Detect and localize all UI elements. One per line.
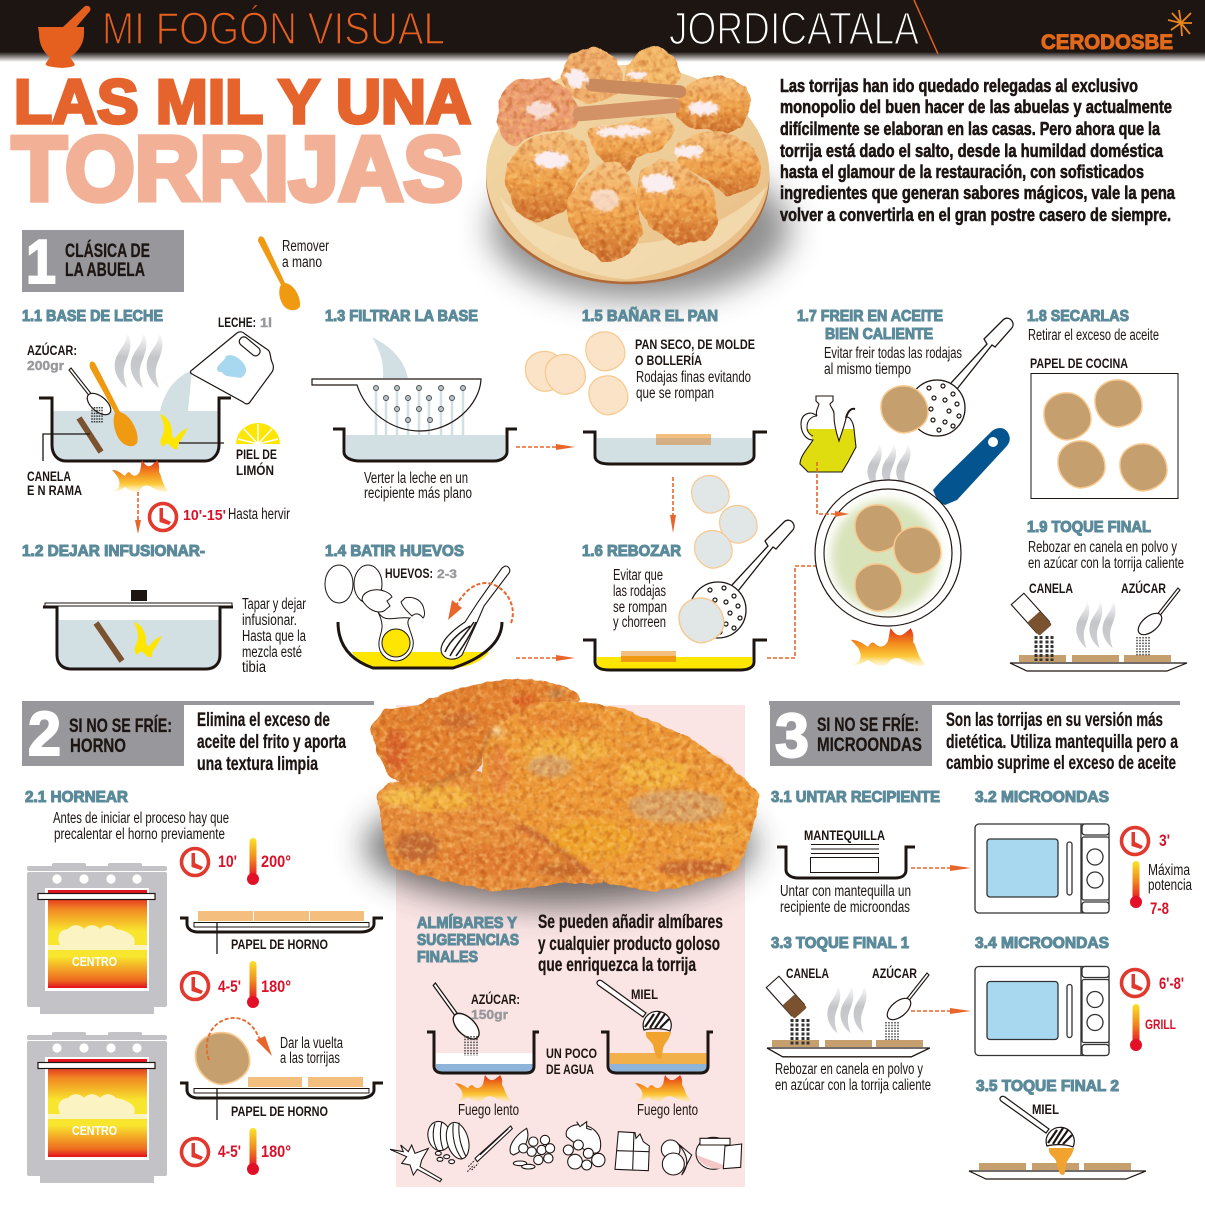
step 3.3 final touch 1: en azúcar con la torrija caliente [775,1077,931,1094]
final time and temp [182,1128,291,1175]
icon: star [1168,10,1192,36]
arrow: 3.1 to 3.2 [911,865,971,871]
step 1.6 coat: y chorreen [613,614,666,631]
step 1.1 milk base: 1.1 BASE DE LECHE [22,308,163,325]
step 3.3 final touch 1: 3.3 TOQUE FINAL 1 [771,935,909,952]
step 1.9 final touch: 1.9 TOQUE FINAL [1027,519,1151,536]
step 1.1 milk base: LIMÓN [236,461,274,478]
section badge 1: 1 [26,228,56,297]
step 1.1 milk base: 1l [260,315,272,330]
panel: section 2 oven [22,700,383,1183]
bake time and temp: 180° [261,977,291,996]
brand: Mi Fogón Visual: MI FOGÓN VISUAL [102,3,445,54]
step 1.8 dry: 1.8 SECARLAS [1027,308,1129,325]
section bar [769,701,1180,705]
icon: mortar and pestle [38,6,90,68]
sugar syrup pot: 150gr [471,1007,508,1022]
step 3.2 microwave: 3.2 MICROONDAS [975,789,1109,806]
photo: big torrija [365,678,760,906]
label: a little water: UN POCO [546,1046,597,1061]
step 1.9 final touch: CANELA [1029,581,1073,596]
step 3.4 microwave grill: 3.4 MICROONDAS [975,935,1109,952]
icon: frying pan [815,428,1010,626]
step 1.4 beat eggs: 2-3 [437,567,457,581]
section description: aceite del frito y aporta [197,732,346,753]
step 3.3 final touch 1: CANELA [786,966,829,981]
step 1.1 milk base: CANELA [27,469,71,484]
stirring note: Remover [282,238,329,255]
syrups description: Se pueden añadir almíbares [538,912,723,933]
preheat time and temp: 10' [218,852,237,871]
heading: syrups [417,913,519,966]
oven tray 1: PAPEL DE HORNO [231,937,328,952]
honey syrup pot: Fuego lento [637,1102,698,1119]
step 1.9 final touch [1010,519,1187,671]
step 1.2 infuse: Tapar y dejar [242,596,306,613]
step 2.1 bake: precalentar el horno previamente [54,826,225,843]
step 3.2 microwave: 3' [1159,831,1170,850]
section badge 1: LA ABUELA [65,260,145,281]
step 2.1 bake: 2.1 HORNEAR [25,789,128,806]
section description: una textura limpia [197,754,318,775]
arrow: 1.5 to 1.6 [670,477,676,533]
step 3.4 microwave grill [975,935,1184,1056]
step 1.7 fry: 1.7 FREIR EN ACEITE [797,308,943,325]
heading: syrups: ALMÍBARES Y [417,913,517,932]
step 3.2 microwave: 7-8 [1150,899,1169,918]
step 3.1 grease: recipiente de microondas [780,899,910,916]
step 1.7 fry [797,308,1013,666]
step 1.2 infuse: tibia [242,659,266,676]
section badge 2 [22,700,184,769]
syrups description: y cualquier producto goloso [538,934,720,955]
step 3.4 microwave grill: GRILL [1145,1016,1176,1032]
step 3.4 microwave grill: 6'-8' [1159,974,1184,993]
step 1.3 filter [312,308,517,502]
step 3.3 final touch 1: Rebozar en canela en polvo y [775,1061,923,1078]
step 3.5 final touch 2 [969,1078,1146,1179]
honey syrup pot [597,980,713,1119]
title: LAS MIL Y UNA [14,68,471,137]
icon: oven 1 [27,863,167,1014]
step 1.1 milk base: E N RAMA [27,483,82,498]
step 2.1 bake: Antes de iniciar el proceso hay que [53,810,229,827]
sugar syrup pot: Fuego lento [458,1102,519,1119]
photo: plate of torrijas [486,47,790,300]
panel: section 3 microwave [766,701,1192,1179]
section badge 2: HORNO [70,736,126,757]
title [12,68,471,220]
step 1.1 milk base: LECHE: [218,315,256,330]
final time and temp: 180° [261,1142,291,1161]
step 1.1 milk base: AZÚCAR: [27,343,77,358]
step 1.5 soak bread: PAN SECO, DE MOLDE [635,337,755,352]
section badge 3: MICROONDAS [817,735,922,756]
step 1.1 milk base: PIEL DE [236,446,277,462]
step 1.6 coat: 1.6 REBOZAR [582,543,681,560]
section badge 2: SI NO SE FRÍE: [69,715,172,737]
section badge 3: SI NO SE FRÍE: [817,714,919,736]
preheat time and temp: 200° [261,852,291,871]
step 3.1 grease [771,789,940,916]
step 1.1 milk base [22,308,290,534]
sugar syrup pot: AZÚCAR: [471,992,520,1007]
step 1.3 filter: recipiente más plano [364,485,472,502]
syrups description: que enriquezca la torrija [538,955,696,976]
arrow: 1.3 to 1.5 [516,444,575,450]
title: TORRIJAS [12,119,463,220]
step 1.1 milk base: 10'-15' [183,507,226,524]
step 1.1 milk base: Hasta hervir [228,506,290,523]
step 3.3 final touch 1: AZÚCAR [872,966,917,981]
step 1.2 infuse: mezcla esté [242,644,302,661]
oven tray 1 [180,911,383,954]
step 1.7 fry: Evitar freir todas las rodajas [824,345,962,362]
syrups description [538,912,723,976]
panel: syrups background [396,705,745,1187]
label: a little water [546,1046,597,1077]
stirring note: a mano [282,254,322,271]
oven tray 2 with flip: a las torrijas [280,1050,340,1067]
section badge 1 [22,228,184,297]
step 1.7 fry: BIEN CALIENTE [825,326,933,343]
step 1.7 fry: al mismo tiempo [824,361,911,378]
icon: oil bottle [800,396,856,472]
step 1.4 beat eggs [325,543,513,668]
step 1.5 soak bread [525,305,767,464]
stirring note [258,236,329,310]
section badge 2: 2 [28,700,61,769]
oven tray 2 with flip [180,1018,383,1120]
intro paragraph [780,76,1176,225]
oven tray 2 with flip: Dar la vuelta [280,1035,343,1052]
arrow: 3.3 to 3.4 [911,1008,971,1014]
step 1.2 infuse [22,543,306,676]
step 1.6 coat: se rompan [613,599,667,616]
step 1.2 infuse: Hasta que la [242,628,306,645]
label: a little water: DE AGUA [546,1062,594,1077]
icons: vanilla, cocoa, spices, fruit, chocolate, eggs, jar [390,1120,742,1182]
step 1.6 coat: Evitar que [613,567,663,584]
heading: syrups: FINALES [417,949,478,966]
heading: syrups: SUGERENCIAS [417,932,519,949]
preheat time and temp [182,838,291,885]
honey syrup pot: MIEL [631,987,658,1002]
section description [197,710,346,775]
oven tray 2 with flip: PAPEL DE HORNO [231,1104,328,1119]
step 3.1 grease: 3.1 UNTAR RECIPIENTE [771,789,940,806]
step 3.1 grease: MANTEQUILLA [804,828,885,843]
step 2.1 bake [25,789,229,843]
sugar syrup pot [427,983,539,1119]
step 3.1 grease: Untar con mantequilla un [780,883,911,900]
section badge 1: CLÁSICA DE [65,240,150,262]
section description: Elimina el exceso de [197,710,330,731]
step 1.2 infuse: infusionar. [242,612,297,629]
step 3.3 final touch 1 [766,935,931,1094]
step 3.2 microwave [975,789,1192,918]
step 1.4 beat eggs: 1.4 BATIR HUEVOS [325,543,464,560]
step 3.2 microwave: potencia [1148,877,1192,894]
step 1.8 dry [1027,308,1178,498]
section description [946,710,1178,774]
step 1.5 soak bread: que se rompan [636,385,714,402]
step 1.9 final touch: AZÚCAR [1121,581,1166,596]
final time and temp: 4-5' [218,1142,241,1161]
step 1.8 dry: PAPEL DE COCINA [1030,356,1128,371]
decorative slash [914,0,938,54]
brand: Jordi Catala: JORDICATALA [669,3,919,54]
step 3.5 final touch 2: MIEL [1032,1102,1059,1117]
arrow: 1.4 to 1.6 [516,655,575,661]
step 3.5 final touch 2: 3.5 TOQUE FINAL 2 [976,1078,1119,1095]
step 1.4 beat eggs: HUEVOS: [385,566,433,581]
step 3.2 microwave: Máxima [1148,862,1190,879]
step 1.5 soak bread: Rodajas finas evitando [636,369,751,386]
section badge 3: 3 [775,702,809,771]
bake time and temp [182,961,291,1008]
bake time and temp: 4-5' [218,977,241,996]
section bar [22,701,374,705]
panel: section 1 classic [22,228,1187,676]
step 1.3 filter: 1.3 FILTRAR LA BASE [325,308,478,325]
step 1.6 coat: las rodajas [613,583,666,600]
step 1.5 soak bread: O BOLLERÍA [635,353,702,368]
step 1.1 milk base: 200gr [27,358,64,373]
icon: oven 2 [27,1032,167,1183]
header bar [0,0,1205,68]
step 1.3 filter: Verter la leche en un [364,470,468,487]
panel: syrups and suggestions [390,912,742,1182]
section badge 3 [770,702,932,771]
step 1.2 infuse: 1.2 DEJAR INFUSIONAR- [22,543,205,560]
step 1.6 coat [582,476,794,670]
arrow: 1.6 to pan [767,563,849,658]
step 1.5 soak bread: 1.5 BAÑAR EL PAN [582,305,718,325]
brand: Cerodosbe: CERODOSBE [1041,31,1173,54]
